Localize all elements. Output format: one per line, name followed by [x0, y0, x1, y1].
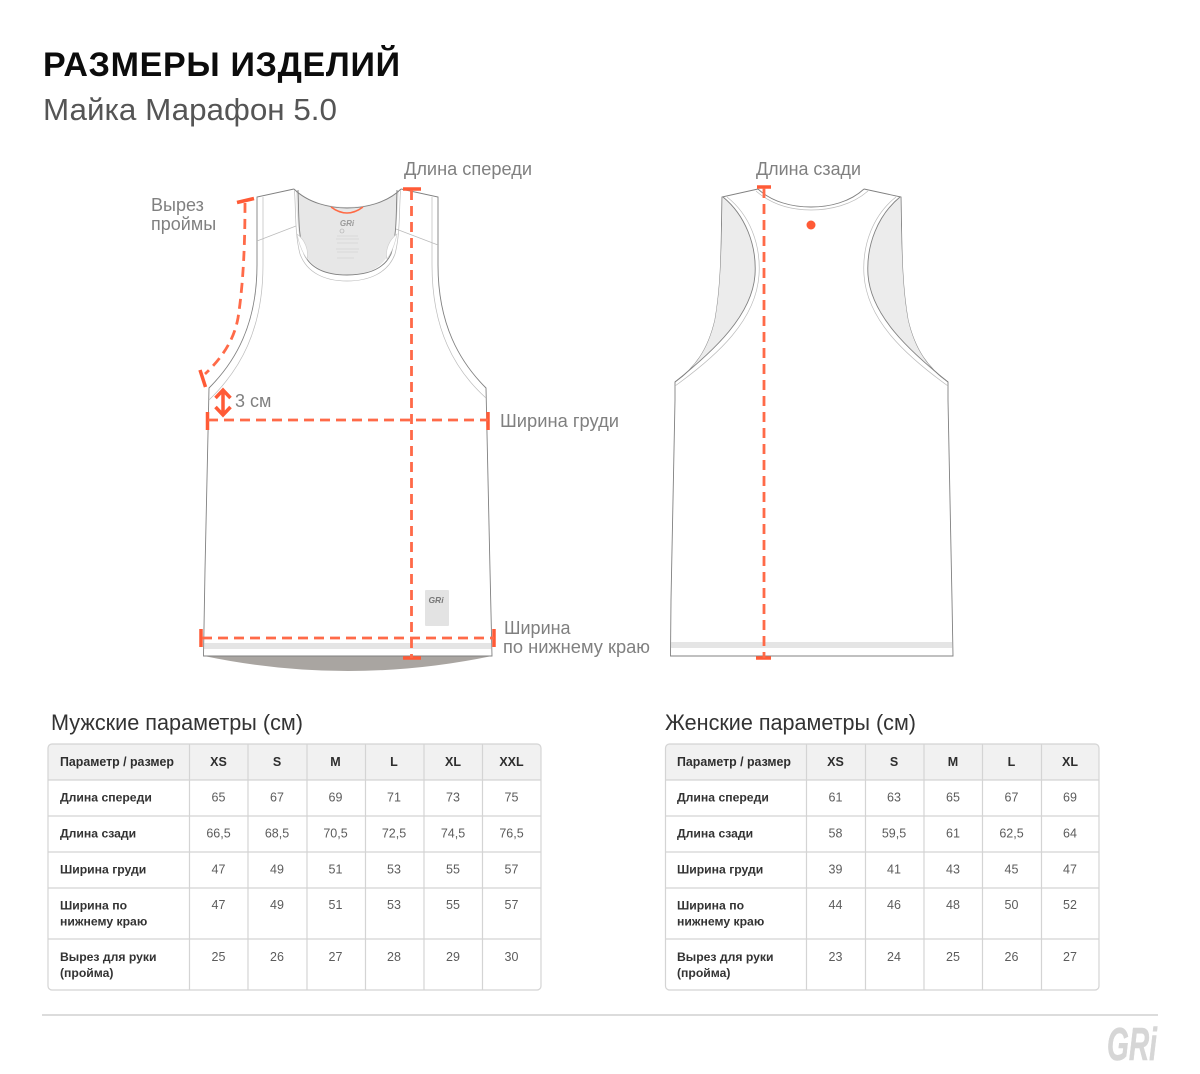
table: women: Длина спереди — [677, 790, 769, 804]
table: men: 74,5 — [441, 826, 465, 840]
footer divider — [42, 1014, 1158, 1016]
table: women: 39 — [829, 862, 842, 876]
table: women: 23 — [829, 950, 842, 964]
measurement: hem width — [201, 629, 494, 647]
table: women: Длина сзади — [677, 826, 753, 840]
table: women: 47 — [1063, 862, 1077, 876]
table: women: Вырез для руки — [677, 950, 774, 964]
table: women: Параметр / размер — [677, 755, 791, 769]
table: men: 51 — [329, 898, 342, 912]
table: men: Длина сзади — [60, 826, 136, 840]
table: men: 66,5 — [206, 826, 231, 840]
table: women: 65 — [946, 790, 960, 804]
table: men: 49 — [270, 862, 284, 876]
back neck lines — [758, 189, 864, 207]
table: men: L — [390, 755, 398, 769]
table: men: 25 — [212, 950, 225, 964]
table: men: 65 — [212, 790, 225, 804]
table: men: 29 — [446, 950, 460, 964]
table: men: (пройма) — [60, 966, 114, 980]
table: women: 64 — [1063, 826, 1077, 840]
neck label — [336, 219, 359, 258]
table: men: 47 — [212, 862, 225, 876]
front body outline — [204, 189, 492, 656]
table: men: 72,5 — [382, 826, 406, 840]
table: men: 28 — [387, 950, 401, 964]
label: hem width: по нижнему краю — [503, 637, 650, 657]
table: women: 46 — [887, 898, 901, 912]
shoulder seams and armhole bands — [209, 197, 486, 400]
hem stitching — [204, 644, 491, 648]
table: men: 57 — [505, 862, 518, 876]
table: men: 51 — [329, 862, 342, 876]
table: women: 26 — [1005, 950, 1018, 964]
label: hem width: Ширина — [504, 618, 572, 638]
table: men: XXL — [499, 755, 524, 769]
measurement: armhole — [200, 198, 254, 387]
table: women: M — [948, 755, 958, 769]
table: women: Ширина по — [677, 898, 744, 912]
table: women: 69 — [1063, 790, 1077, 804]
neck orange tape — [331, 207, 363, 213]
neck lines — [294, 189, 401, 208]
label: armhole: проймы — [151, 214, 216, 234]
table: women: 67 — [1005, 790, 1018, 804]
measurement: front length — [403, 189, 421, 658]
table: women: 61 — [946, 826, 960, 840]
table: men: 55 — [446, 898, 460, 912]
hem tag: GRi — [428, 595, 444, 605]
table: men: 47 — [212, 898, 225, 912]
back neck dot — [806, 220, 816, 230]
measurement: chest width — [208, 412, 488, 430]
table: men: 57 — [505, 898, 518, 912]
front tank top — [204, 189, 492, 671]
label: armhole: Вырез — [151, 195, 204, 215]
table: men: M — [330, 755, 341, 769]
table: women: 43 — [946, 862, 960, 876]
measurement: 3 cm arrow — [216, 390, 230, 415]
table: men: нижнему краю — [60, 914, 147, 928]
neck inner fill — [296, 190, 399, 275]
table: women: нижнему краю — [677, 914, 764, 928]
right armhole gray panel — [868, 197, 948, 382]
table: women: 62,5 — [999, 826, 1024, 840]
underarm bumps — [297, 234, 397, 259]
table: men: 26 — [270, 950, 284, 964]
table: men: Длина спереди — [60, 790, 152, 804]
heading: men: Мужские параметры (см) — [51, 710, 303, 735]
label: back length: Длина сзади — [756, 159, 861, 179]
back hem stitching — [671, 643, 952, 647]
label: front length: Длина спереди — [404, 159, 532, 179]
table: men: XL — [445, 755, 461, 769]
table: women: XS — [827, 755, 844, 769]
table: women — [665, 744, 1099, 990]
table: women: 59,5 — [882, 826, 906, 840]
table: women: 41 — [887, 862, 901, 876]
table: men: 30 — [505, 950, 518, 964]
measurement: back length — [756, 187, 771, 658]
table: women: 52 — [1063, 898, 1077, 912]
table: men: 76,5 — [499, 826, 524, 840]
neck label: GRi — [340, 219, 355, 228]
table: men: 67 — [270, 790, 284, 804]
table: men: 55 — [446, 862, 460, 876]
table: men: 70,5 — [323, 826, 348, 840]
back body outline — [670, 189, 953, 656]
table: men: 69 — [329, 790, 342, 804]
table: women: 48 — [946, 898, 960, 912]
table: women: 24 — [887, 950, 901, 964]
table: women: 61 — [829, 790, 842, 804]
table: men: 49 — [270, 898, 284, 912]
table: women: 27 — [1063, 950, 1077, 964]
table: men — [48, 744, 541, 990]
hem tag — [425, 590, 449, 626]
table: men: 53 — [387, 898, 401, 912]
left armhole gray panel — [675, 197, 755, 382]
table: men: Вырез для руки — [60, 950, 157, 964]
table: men: 53 — [387, 862, 401, 876]
table: women: L — [1008, 755, 1016, 769]
table: women: 58 — [829, 826, 842, 840]
table: women: S — [890, 755, 898, 769]
table: women: XL — [1062, 755, 1078, 769]
table: men: 68,5 — [265, 826, 289, 840]
table: men: 73 — [446, 790, 460, 804]
table: women: 50 — [1005, 898, 1018, 912]
label: 3 cm: 3 см — [235, 391, 271, 411]
table: women: (пройма) — [677, 966, 730, 980]
label: chest width: Ширина груди — [500, 411, 619, 431]
title: РАЗМЕРЫ ИЗДЕЛИЙ — [43, 45, 400, 84]
table: men: Ширина по — [60, 898, 127, 912]
armhole lines — [675, 197, 948, 382]
table: men: Ширина груди — [60, 862, 146, 876]
table: men: XS — [210, 755, 227, 769]
back hem shadow — [204, 656, 492, 671]
table: women: 63 — [887, 790, 901, 804]
table: women: Ширина груди — [677, 862, 763, 876]
table: women: 44 — [829, 898, 842, 912]
footer logo: GRi — [1107, 1018, 1158, 1070]
subtitle: Майка Марафон 5.0 — [43, 92, 337, 127]
table: women: 25 — [946, 950, 960, 964]
table: men: 71 — [387, 790, 401, 804]
table: men: Параметр / размер — [60, 755, 174, 769]
back tank top — [670, 189, 953, 656]
table: men: 75 — [505, 790, 518, 804]
table: men: S — [273, 755, 281, 769]
heading: women: Женские параметры (см) — [665, 710, 916, 735]
table: women: 45 — [1005, 862, 1018, 876]
table: men: 27 — [329, 950, 342, 964]
